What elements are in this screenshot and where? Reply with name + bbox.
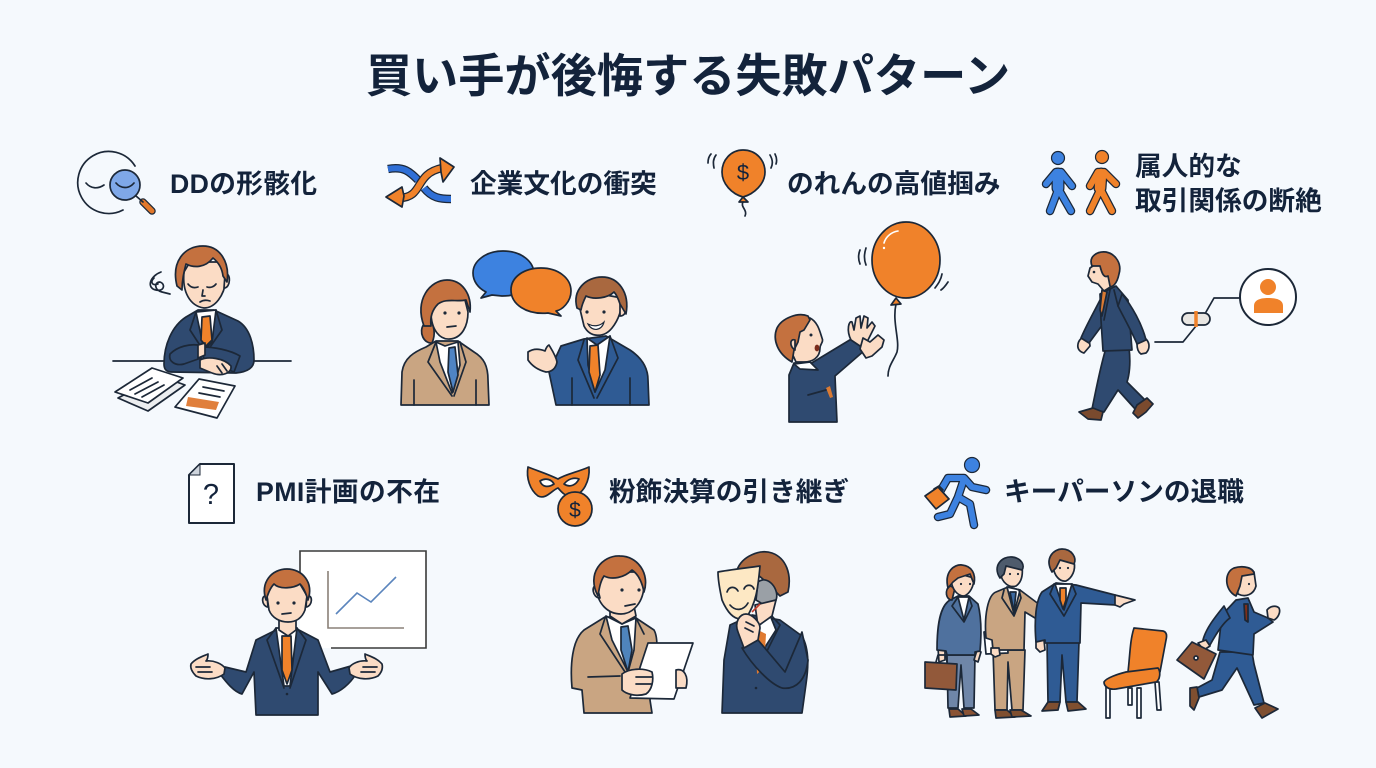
title: 買い手が後悔する失敗パターン <box>366 50 1010 102</box>
heading: のれんの高値掴み <box>787 169 1000 199</box>
icon: document with question mark <box>189 464 234 523</box>
icon: sleepy eye with magnifier <box>78 151 152 213</box>
icon: dollar balloon <box>708 150 777 216</box>
panel: corporate culture clash <box>386 158 657 405</box>
icon: mask and dollar coin <box>527 467 592 526</box>
heading: PMI計画の不在 <box>256 477 440 507</box>
heading: two lines: 取引関係の断絶 <box>1135 186 1322 216</box>
icon: document with question mark: ? <box>203 479 219 511</box>
heading: two lines: 属人的な <box>1135 152 1242 182</box>
panel: loss of personal relationships <box>1046 150 1322 420</box>
icon: two walking figures <box>1046 150 1116 211</box>
panel: DD formalization <box>78 151 317 418</box>
icon: crossing arrows <box>386 158 454 207</box>
icon: running figure with briefcase <box>925 458 986 525</box>
illustration: man dozing over papers <box>113 246 291 418</box>
woman with bag <box>925 565 981 717</box>
heading: DDの形骸化 <box>170 169 317 199</box>
broken connection line <box>1155 298 1241 342</box>
speech bubble: blue <box>473 251 534 298</box>
heading: 企業文化の衝突 <box>470 169 657 199</box>
illustration: man reaching for balloon <box>775 222 948 422</box>
heading: two lines <box>1135 152 1322 216</box>
panel: no PMI plan <box>189 464 440 715</box>
heading: キーパーソンの退職 <box>1004 477 1244 507</box>
icon: dollar balloon: $ <box>737 160 749 185</box>
illustration: two colleagues talking <box>401 251 649 405</box>
man running away with briefcase <box>1177 567 1280 718</box>
illustration: reader and masked man <box>571 552 808 713</box>
illustration: man shrugging before chart <box>191 551 426 715</box>
empty orange chair <box>1104 628 1167 718</box>
panel: inherited window-dressed accounts <box>527 467 849 713</box>
icon: contact person in circle <box>1240 269 1296 325</box>
illustration: man walking away from broken link <box>1078 252 1296 420</box>
navy suit man pointing <box>1035 549 1135 711</box>
panel: overpaying for goodwill <box>708 150 1000 422</box>
icon: mask and dollar coin: $ <box>569 499 581 522</box>
speech bubble: orange <box>511 268 571 316</box>
panel: key person resignation <box>925 458 1280 718</box>
tan suit man <box>984 557 1072 718</box>
illustration: colleagues pointing at empty chair <box>925 549 1280 718</box>
chart board <box>300 551 426 648</box>
heading: 粉飾決算の引き継ぎ <box>609 477 849 507</box>
